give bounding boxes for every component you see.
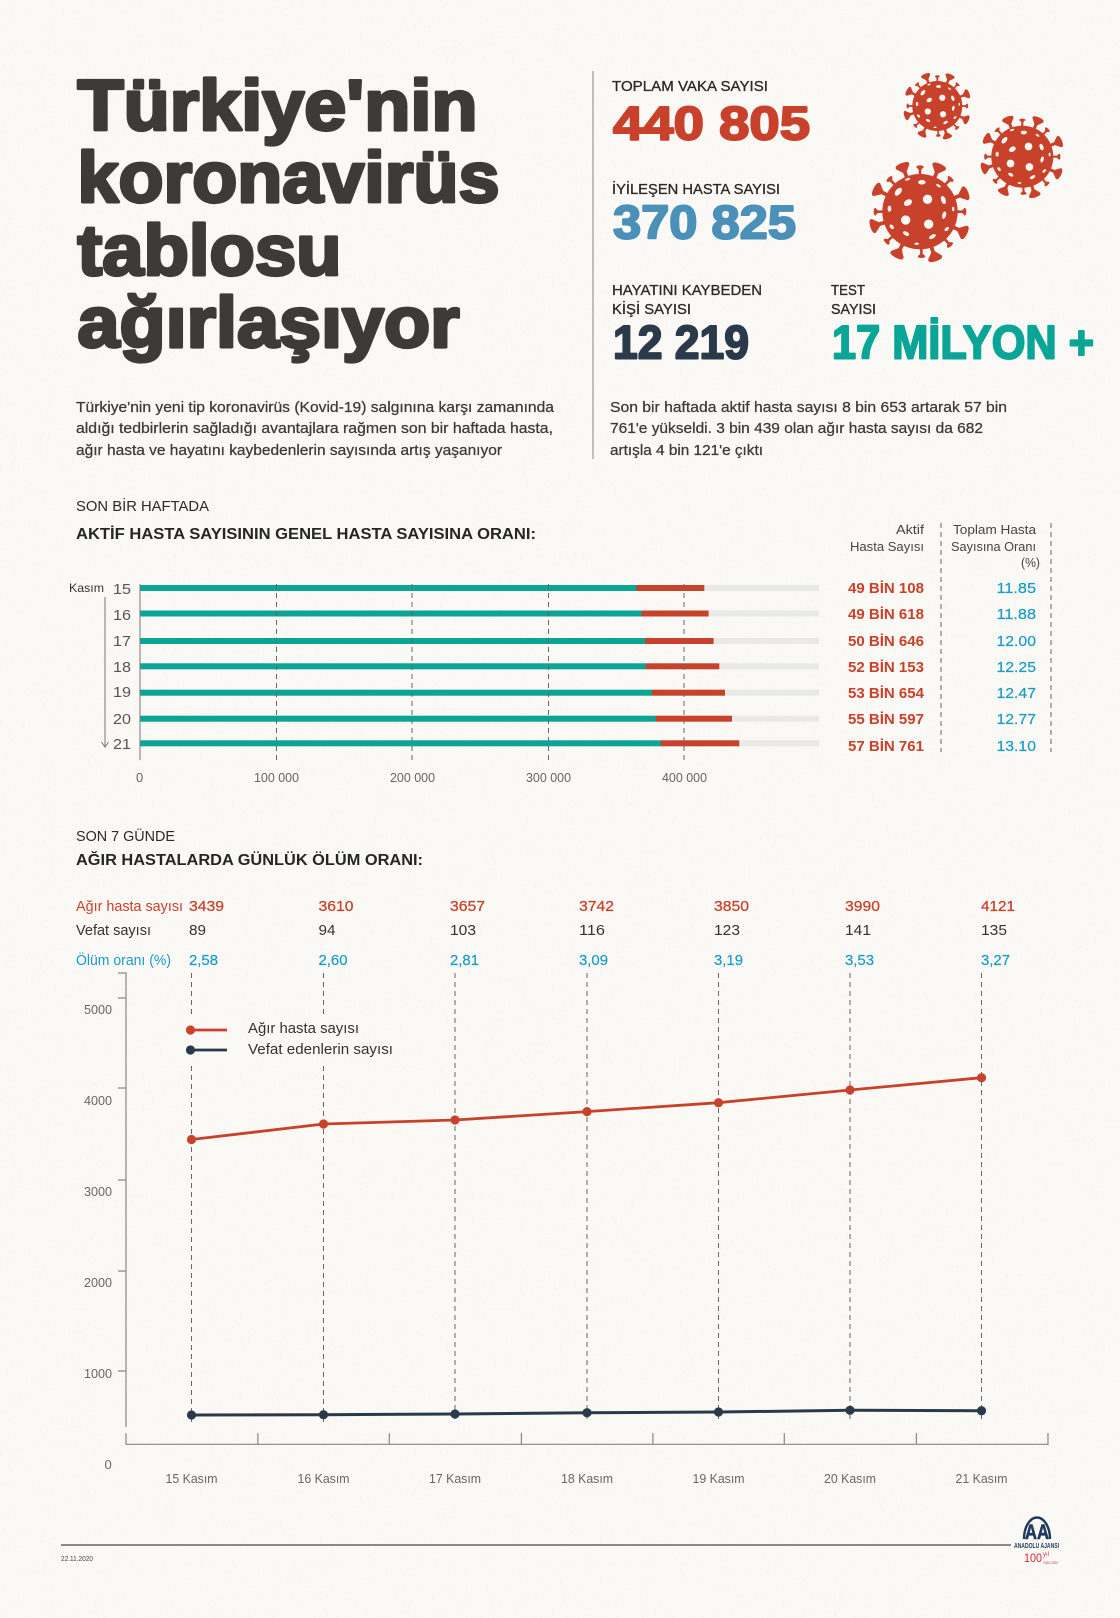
table row: vefat sayısı: 103: [450, 923, 476, 939]
heading: bar chart: [76, 497, 536, 543]
line chart x axis labels: 18 Kasım: [561, 1471, 613, 1486]
line chart x axis labels: [166, 1471, 1008, 1486]
logo: Anadolu Ajansı: 100: [1024, 1551, 1042, 1565]
column: oran values: 11.88: [996, 607, 1036, 623]
vertical divider: [592, 71, 594, 459]
legend: [186, 1021, 393, 1058]
icon: virus medium: [980, 115, 1064, 199]
icon: virus small: [903, 72, 971, 140]
table row: ağır hasta sayısı: 3657: [450, 899, 485, 915]
line chart x axis labels: 19 Kasım: [692, 1471, 744, 1486]
title: ağırlaşıyor: [78, 284, 460, 363]
column headers: (%): [1021, 555, 1040, 570]
line chart y axis labels: 2000: [84, 1275, 112, 1290]
heading: line chart: AĞIR HASTALARDA GÜNLÜK ÖLÜM ORANI:: [76, 851, 423, 869]
line chart x axis labels: 17 Kasım: [429, 1471, 481, 1486]
column headers: Sayısına Oranı: [951, 539, 1036, 554]
table row: ağır hasta sayısı: 3439: [189, 899, 224, 915]
title: koronavirüs: [78, 139, 500, 218]
stat: test: 17 MİLYON +: [832, 316, 1094, 370]
column: aktif hasta sayısı values: 49 BİN 108: [848, 580, 924, 597]
table row: ağır hasta sayısı: 3610: [318, 899, 354, 915]
line chart x axis labels: 20 Kasım: [824, 1471, 876, 1486]
intro text right: artışla 4 bin 121'e çıktı: [610, 443, 763, 459]
heading: bar chart: SON BİR HAFTADA: [76, 497, 209, 515]
bar chart x axis labels: 100 000: [254, 770, 299, 785]
table row: vefat sayısı: Vefat sayısı: [76, 923, 151, 939]
stat: toplam vaka: [612, 79, 810, 150]
stat: hayatını kaybeden: 12 219: [613, 316, 749, 370]
table row: ağır hasta sayısı: 3850: [714, 899, 749, 915]
column: oran values: 11.85: [996, 581, 1036, 597]
line chart y axis labels: 1000: [84, 1366, 112, 1381]
bar chart x axis labels: 300 000: [526, 770, 571, 785]
stat: toplam vaka: TOPLAM VAKA SAYISI: [612, 79, 768, 95]
bar chart x axis labels: 200 000: [390, 770, 435, 785]
table row: vefat sayısı: [76, 923, 1007, 939]
table row: ağır hasta sayısı: 3742: [579, 899, 614, 915]
table row: ağır hasta sayısı: [76, 899, 1015, 915]
table row: ölüm oranı: 2,60: [318, 953, 348, 969]
line chart y axis labels: [84, 1002, 112, 1472]
column headers: [850, 522, 1040, 570]
table row: ağır hasta sayısı: Ağır hasta sayısı: [76, 899, 183, 915]
table row: ölüm oranı: 3,53: [845, 953, 874, 969]
day labels: [69, 581, 131, 753]
table row: vefat sayısı: 135: [981, 923, 1007, 939]
line chart y axis labels: 0: [104, 1457, 112, 1472]
title: [78, 67, 500, 363]
day labels: 16: [113, 608, 131, 624]
heading: line chart: [76, 827, 423, 869]
table row: vefat sayısı: 94: [318, 923, 336, 939]
title: tablosu: [78, 212, 342, 291]
table row: ölüm oranı: Ölüm oranı (%): [76, 951, 171, 969]
stat: toplam vaka: 440 805: [613, 98, 810, 150]
column: oran values: [996, 581, 1036, 755]
line chart x axis labels: 16 Kasım: [298, 1471, 350, 1486]
footer rule: [61, 1544, 1011, 1546]
series: vefat edenlerin sayısı: [187, 1406, 986, 1420]
day labels: 17: [113, 634, 131, 650]
column: oran values: 12.00: [996, 634, 1036, 650]
table row: ölüm oranı: 2,58: [189, 953, 218, 969]
day labels: Kasım: [69, 581, 104, 595]
heading: bar chart: AKTİF HASTA SAYISININ GENEL HASTA SAYISINA ORANI:: [76, 526, 536, 543]
stat: hayatını kaybeden: [612, 283, 762, 370]
table row: ölüm oranı: 3,27: [981, 953, 1010, 969]
bar chart x axis labels: 0: [136, 770, 143, 785]
intro text right: [610, 400, 1007, 459]
column: aktif hasta sayısı values: 50 BİN 646: [848, 633, 924, 650]
intro text left: [76, 400, 555, 459]
table row: vefat sayısı: 116: [579, 923, 605, 939]
legend: Vefat edenlerin sayısı: [248, 1042, 393, 1058]
stat: test: SAYISI: [831, 302, 876, 318]
table row: vefat sayısı: 89: [189, 923, 206, 939]
table row: vefat sayısı: 123: [714, 923, 740, 939]
heading: line chart: SON 7 GÜNDE: [76, 827, 175, 845]
table row: ölüm oranı: 2,81: [450, 953, 479, 969]
icon: virus large: [868, 161, 971, 263]
title: Türkiye'nin: [78, 67, 478, 146]
column: oran values: 12.25: [996, 660, 1036, 676]
column: aktif hasta sayısı values: 57 BİN 761: [848, 738, 924, 755]
column: oran values: 12.77: [996, 712, 1036, 728]
column: aktif hasta sayısı values: 49 BİN 618: [848, 606, 924, 623]
bar chart x axis labels: 400 000: [662, 770, 707, 785]
day labels: 20: [113, 712, 131, 728]
table row: ağır hasta sayısı: 3990: [845, 899, 880, 915]
column headers: Hasta Sayısı: [850, 539, 924, 554]
legend: Ağır hasta sayısı: [248, 1021, 359, 1037]
stat: test: [831, 283, 1094, 370]
logo: Anadolu Ajansı: yıl: [1043, 1552, 1049, 1558]
line chart y axis labels: 5000: [84, 1002, 112, 1017]
intro text left: Türkiye'nin yeni tip koronavirüs (Kovid-19) salgınına karşı zamanında: [76, 400, 555, 416]
column: aktif hasta sayısı values: 55 BİN 597: [848, 711, 924, 728]
column headers: Aktif: [896, 522, 924, 537]
line chart x axis labels: 21 Kasım: [956, 1471, 1008, 1486]
line chart x axis labels: 15 Kasım: [166, 1471, 218, 1486]
stat: iyileşen: İYİLEŞEN HASTA SAYISI: [612, 180, 780, 198]
table row: ağır hasta sayısı: 4121: [981, 899, 1015, 915]
series: ağır hasta sayısı: [187, 1073, 986, 1144]
column: oran values: 12.47: [996, 686, 1036, 702]
logo: Anadolu Ajansı: ANADOLU AJANSI: [1014, 1541, 1059, 1550]
stat: hayatını kaybeden: HAYATINI KAYBEDEN: [612, 283, 762, 299]
column: aktif hasta sayısı values: [848, 580, 924, 755]
intro text left: ağır hasta ve hayatını kaybedenlerin sayısında artış yaşanıyor: [76, 443, 502, 459]
logo: Anadolu Ajansı: 1920-2020: [1043, 1561, 1058, 1565]
bar chart: [140, 584, 819, 760]
logo: Anadolu Ajansı: AA: [1025, 1521, 1049, 1544]
column: aktif hasta sayısı values: 52 BİN 153: [848, 659, 924, 676]
stat: hayatını kaybeden: KİŞİ SAYISI: [612, 300, 691, 318]
arrow: days downward: [102, 597, 108, 747]
line chart y axis labels: 4000: [84, 1093, 112, 1108]
day labels: 15: [113, 582, 131, 598]
stat: test: TEST: [831, 283, 865, 299]
day labels: 18: [113, 660, 131, 676]
intro text right: 761'e yükseldi. 3 bin 439 olan ağır hasta sayısı da 682: [610, 421, 983, 437]
column: aktif hasta sayısı values: 53 BİN 654: [848, 685, 924, 702]
table row: ölüm oranı: 3,09: [579, 953, 608, 969]
date: 22.11.2020: [61, 1554, 93, 1563]
table row: ölüm oranı: [76, 951, 1010, 969]
table row: vefat sayısı: 141: [845, 923, 871, 939]
logo: Anadolu Ajansı: [1014, 1518, 1059, 1565]
stat: iyileşen: 370 825: [613, 196, 796, 250]
intro text left: aldığı tedbirlerin sağladığı avantajlara rağmen son bir haftada hasta,: [76, 421, 553, 437]
bar chart x axis labels: [136, 770, 707, 785]
day labels: 19: [113, 685, 131, 701]
day labels: 21: [113, 737, 131, 753]
line chart: [118, 973, 1048, 1444]
table row: ölüm oranı: 3,19: [714, 953, 743, 969]
column: oran values: 13.10: [996, 739, 1036, 755]
column headers: Toplam Hasta: [953, 522, 1037, 537]
line chart y axis labels: 3000: [84, 1184, 112, 1199]
intro text right: Son bir haftada aktif hasta sayısı 8 bin 653 artarak 57 bin: [610, 400, 1007, 416]
